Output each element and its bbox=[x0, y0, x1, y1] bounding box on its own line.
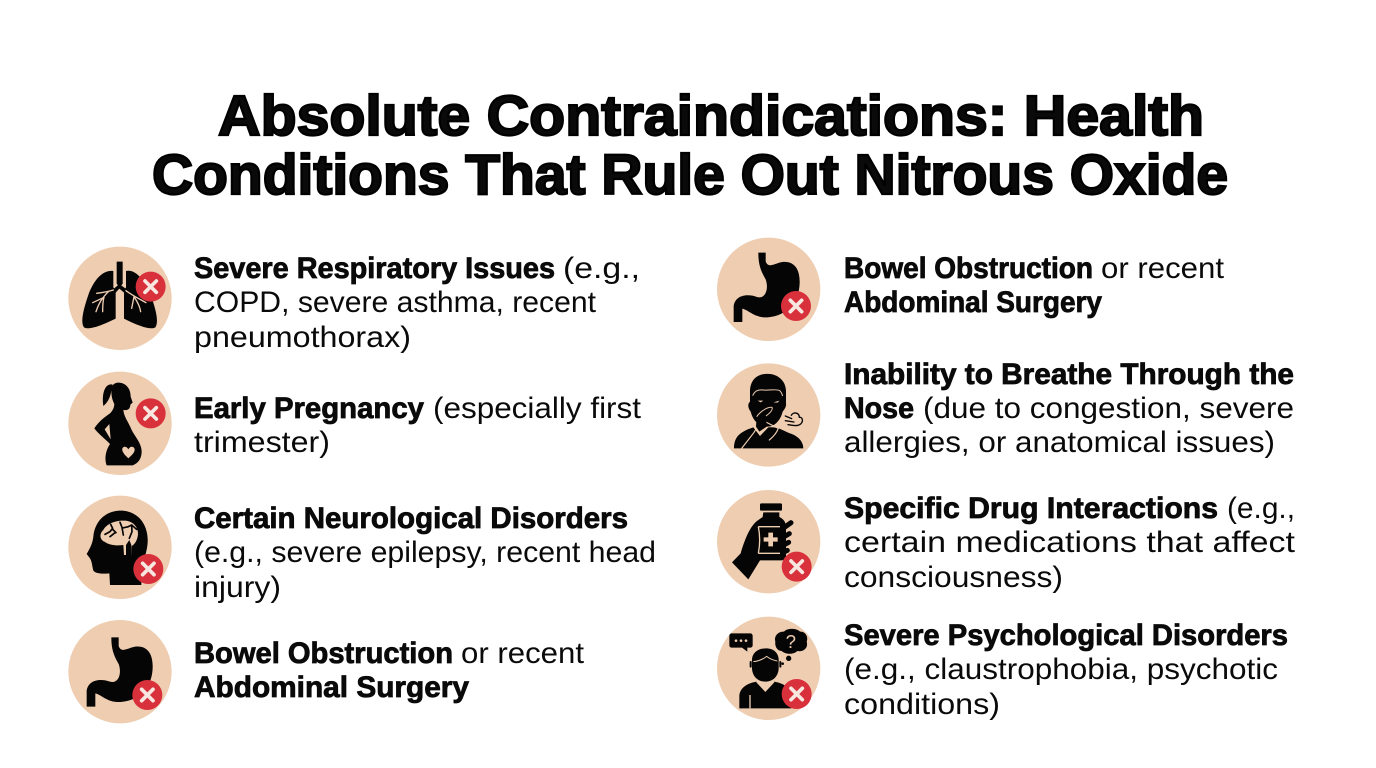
icon: head with brain bbox=[68, 496, 172, 599]
text: early pregnancy bbox=[194, 392, 641, 459]
panel: inability to breathe through the nose bbox=[717, 358, 1294, 467]
icon: lungs bbox=[68, 247, 172, 350]
panel: severe respiratory issues bbox=[68, 247, 640, 354]
icon: pregnant silhouette bbox=[68, 372, 172, 475]
icon: hand holding medicine bottle bbox=[717, 490, 820, 593]
text: early pregnancy: Early Pregnancy bbox=[194, 392, 425, 425]
text: bowel obstruction right: Bowel Obstruction bbox=[844, 252, 1093, 285]
text: certain neurological disorders: injury) bbox=[194, 571, 281, 604]
title bbox=[152, 84, 1228, 207]
icon: person pinching nose bbox=[717, 363, 820, 467]
text: bowel obstruction left: Bowel Obstruction bbox=[194, 637, 453, 670]
title: Conditions That Rule Out Nitrous Oxide bbox=[152, 143, 1228, 207]
panel: early pregnancy bbox=[68, 372, 641, 475]
text: severe psychological disorders: conditions) bbox=[844, 688, 1000, 721]
text: severe respiratory issues: COPD, severe asthma, recent bbox=[194, 286, 596, 319]
text: bowel obstruction right bbox=[844, 252, 1224, 319]
text: inability to breathe bbox=[844, 358, 1294, 459]
text: certain neurological disorders bbox=[194, 502, 656, 604]
icon: red x badge bbox=[132, 680, 162, 710]
text: inability to breathe: allergies, or anatomical issues) bbox=[844, 426, 1275, 459]
title: Absolute Contraindications: Health bbox=[218, 84, 1204, 148]
text: specific drug interactions: (e.g., bbox=[1227, 492, 1295, 525]
text: specific drug interactions: certain medications that affect bbox=[844, 526, 1295, 559]
icon: red x badge bbox=[782, 679, 812, 709]
icon: red x badge bbox=[133, 554, 163, 584]
text: certain neurological disorders: Certain Neurological Disorders bbox=[194, 502, 628, 535]
icon: red x badge bbox=[781, 291, 811, 321]
text: specific drug interactions: consciousness) bbox=[844, 561, 1063, 594]
text: severe respiratory issues bbox=[194, 252, 640, 354]
text: bowel obstruction right: Abdominal Surgery bbox=[844, 286, 1103, 319]
text: severe respiratory issues: Severe Respiratory Issues bbox=[194, 252, 555, 285]
icon: person with speech and thought bubbles: ? bbox=[786, 631, 796, 652]
icon: red x badge bbox=[136, 398, 166, 428]
text: early pregnancy: (especially first bbox=[433, 392, 641, 425]
text: inability to breathe: Nose bbox=[844, 392, 914, 425]
text: certain neurological disorders: (e.g., severe epilepsy, recent head bbox=[194, 536, 656, 569]
icon: red x badge bbox=[782, 552, 812, 582]
text: early pregnancy: trimester) bbox=[194, 426, 330, 459]
icon: stomach bbox=[717, 238, 820, 341]
text: specific drug interactions bbox=[844, 492, 1295, 594]
text: severe psychological disorders: Severe Psychological Disorders bbox=[844, 619, 1288, 652]
icon: person with speech and thought bubbles bbox=[717, 617, 820, 720]
icon: red x badge bbox=[136, 272, 166, 302]
panel: specific drug interactions bbox=[717, 490, 1295, 594]
icon: stomach bbox=[68, 620, 172, 723]
text: bowel obstruction left: or recent bbox=[461, 637, 584, 670]
text: severe respiratory issues: pneumothorax) bbox=[194, 321, 411, 354]
panel: bowel obstruction left bbox=[68, 620, 584, 723]
text: inability to breathe: (due to congestion, severe bbox=[923, 392, 1294, 425]
text: specific drug interactions: Specific Drug Interactions bbox=[844, 492, 1218, 525]
text: severe psychological disorders: (e.g., claustrophobia, psychotic bbox=[844, 653, 1278, 686]
text: severe respiratory issues: (e.g., bbox=[563, 252, 640, 285]
text: bowel obstruction left bbox=[194, 637, 584, 704]
text: inability to breathe: Inability to Breathe Through the bbox=[844, 358, 1294, 391]
panel: certain neurological disorders bbox=[68, 496, 656, 604]
panel: bowel obstruction right bbox=[717, 238, 1224, 341]
text: bowel obstruction right: or recent bbox=[1101, 252, 1224, 285]
text: bowel obstruction left: Abdominal Surgery bbox=[194, 671, 470, 704]
panel: severe psychological disorders bbox=[717, 617, 1288, 721]
text: severe psychological disorders bbox=[844, 619, 1288, 721]
